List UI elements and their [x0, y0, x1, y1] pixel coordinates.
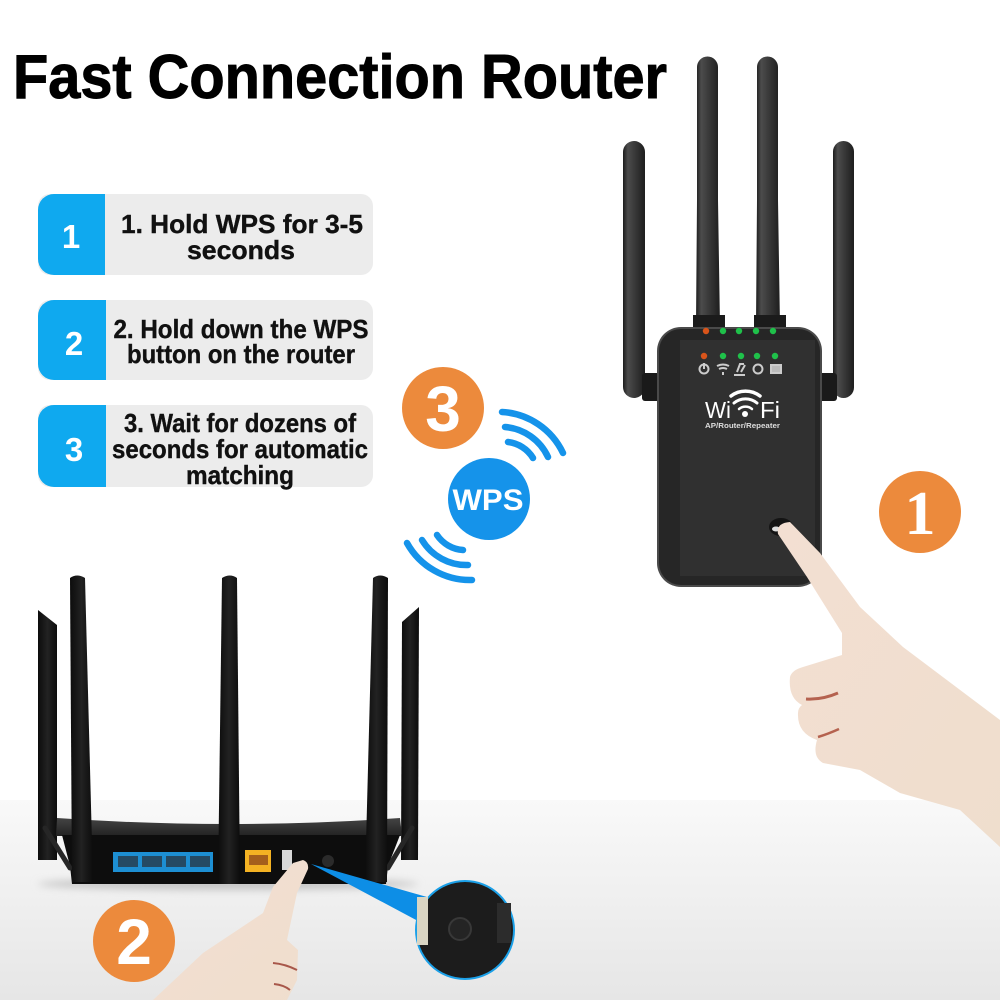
- panel: step 1: 1. Hold WPS for 3-5: [121, 209, 363, 239]
- power jack: [322, 855, 334, 867]
- badge: step 2: 2: [116, 906, 152, 978]
- panel: step 2: 2: [65, 325, 83, 362]
- badge: step 1: 1: [904, 480, 936, 548]
- repeater antennas: [623, 56, 854, 401]
- repeater body: [657, 327, 822, 587]
- callout beam: [311, 864, 427, 921]
- repeater device: [623, 56, 854, 587]
- background floor: [0, 800, 1000, 1000]
- badge: step 3: 3: [425, 373, 461, 445]
- icon: WPS signal: WPS: [452, 484, 524, 517]
- router body: [62, 835, 400, 884]
- WPS button: [769, 518, 793, 536]
- router outer antennas: [38, 607, 419, 860]
- panel: step 2: button on the router: [127, 339, 355, 369]
- panel: step 2: [38, 300, 373, 380]
- hand: pressing repeater: [778, 522, 1000, 847]
- callout: WPS button zoom: [416, 881, 514, 979]
- panel: step 3: 3: [65, 431, 83, 468]
- LAN ports: [113, 852, 213, 872]
- router top shelf: [56, 818, 402, 836]
- panel: step 1: 1: [62, 218, 80, 255]
- hand: pressing router: [153, 860, 308, 1000]
- WAN port: [245, 850, 271, 872]
- panel: step 2: 2. Hold down the WPS: [114, 314, 368, 344]
- badge: step 3: [402, 367, 484, 449]
- status icons: [700, 363, 781, 375]
- wifi router: [38, 576, 419, 890]
- panel: step 3: matching: [186, 460, 294, 490]
- panel: step 3: seconds for automatic: [112, 434, 368, 464]
- panel: step 1: seconds: [187, 235, 295, 265]
- USB port: [282, 850, 292, 870]
- panel: step 3: [38, 405, 373, 490]
- wifi logo: AP/Router/Repeater: [705, 421, 780, 430]
- icon: WPS signal: [407, 412, 563, 580]
- wifi logo: [705, 391, 780, 430]
- router shadow: [38, 878, 418, 890]
- badge: step 1: [879, 471, 961, 553]
- status lights: [701, 328, 778, 359]
- panel: step 3: 3. Wait for dozens of: [124, 408, 356, 438]
- title: Fast Connection Router: [13, 43, 667, 112]
- wifi logo: Wi: [705, 397, 731, 423]
- wifi logo: Fi: [760, 397, 780, 423]
- badge: step 2: [93, 900, 175, 982]
- router front antennas: [70, 576, 388, 884]
- panel: step 1: [38, 194, 373, 275]
